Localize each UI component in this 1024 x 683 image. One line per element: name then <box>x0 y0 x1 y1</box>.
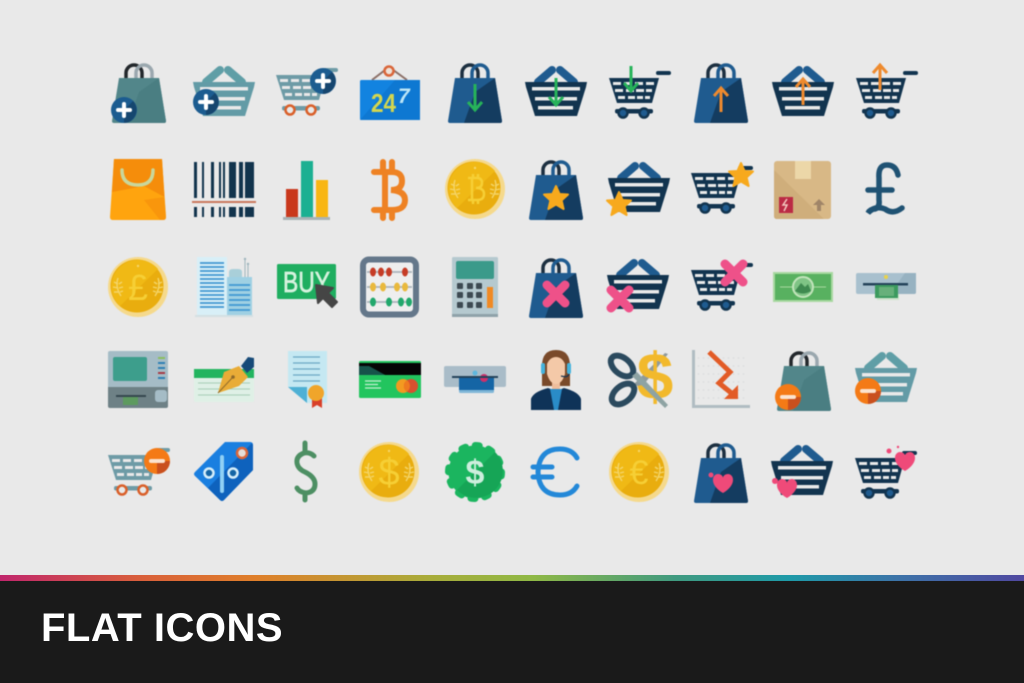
rainbow divider bar <box>0 575 1024 581</box>
icon: bar chart <box>283 161 330 220</box>
icon: check and pen <box>194 357 254 402</box>
icon: dollar symbol <box>297 443 315 500</box>
icon: dollar coin <box>359 442 419 502</box>
icon: bitcoin symbol <box>374 162 405 218</box>
icon: bag download <box>448 65 502 123</box>
icon: cart remove <box>691 264 751 310</box>
icon: basket favourite <box>607 166 670 215</box>
icon: basket remove <box>607 263 669 309</box>
footer band <box>0 581 1024 683</box>
icon: pound coin: £ <box>128 267 148 308</box>
icon: dollar coin: $ <box>378 452 400 494</box>
title: FLAT ICONS <box>41 606 283 650</box>
icon: green dollar badge: $ <box>466 454 485 492</box>
icon: 24/7 sign: 7 <box>398 85 411 108</box>
icon: buy button <box>277 264 337 307</box>
icon: cart minus <box>108 448 170 494</box>
icon: bag add <box>111 65 166 123</box>
icon: orange shopping bag <box>110 159 166 220</box>
icon: green dollar badge <box>448 446 503 498</box>
icon: certificate document <box>288 351 327 408</box>
icon: basket minus <box>855 356 917 404</box>
icon: card reader <box>444 366 506 393</box>
icon: basket add <box>193 70 255 116</box>
icon: basket download <box>525 70 587 116</box>
icon: cash slot <box>856 273 916 300</box>
icon: bag love <box>694 445 748 503</box>
icon: falling chart <box>694 350 750 406</box>
icon: calculator <box>452 257 498 317</box>
icon: credit card <box>359 361 421 398</box>
icon: banknote <box>773 272 833 302</box>
icon: pound coin <box>108 257 168 317</box>
icon: scissors cutting dollar: $ <box>637 339 673 413</box>
icon: basket love <box>771 449 833 498</box>
icon: bag remove <box>529 260 583 318</box>
icon: cart love <box>855 446 915 498</box>
icon: cart download <box>609 66 669 118</box>
icon: cart add <box>276 68 336 114</box>
icon: euro symbol <box>533 449 577 495</box>
icon: 24/7 sign: 24 <box>371 88 396 118</box>
icon: bag minus <box>775 353 831 411</box>
icon: office buildings <box>195 257 253 317</box>
icon: cardboard box <box>774 161 831 219</box>
icon: euro coin <box>609 442 669 502</box>
icon: 24/7 sign <box>360 66 420 120</box>
icon: ATM machine <box>108 351 168 408</box>
icon: cart favourite <box>691 163 753 212</box>
icon: abacus <box>363 260 416 314</box>
icon: bitcoin coin <box>445 159 505 219</box>
icon: scissors cutting dollar <box>607 339 673 413</box>
icon: discount tag <box>194 442 253 501</box>
icon: buy button: BUY <box>283 267 330 299</box>
icon: support agent <box>531 350 581 410</box>
icon: bag upload <box>694 65 748 123</box>
icon: euro coin: € <box>630 454 649 492</box>
icon: pound symbol <box>868 165 902 213</box>
icon: basket upload <box>772 70 834 116</box>
icon: bag favourite <box>529 162 583 220</box>
icon: cart upload <box>856 65 916 118</box>
icon: barcode <box>192 162 256 217</box>
